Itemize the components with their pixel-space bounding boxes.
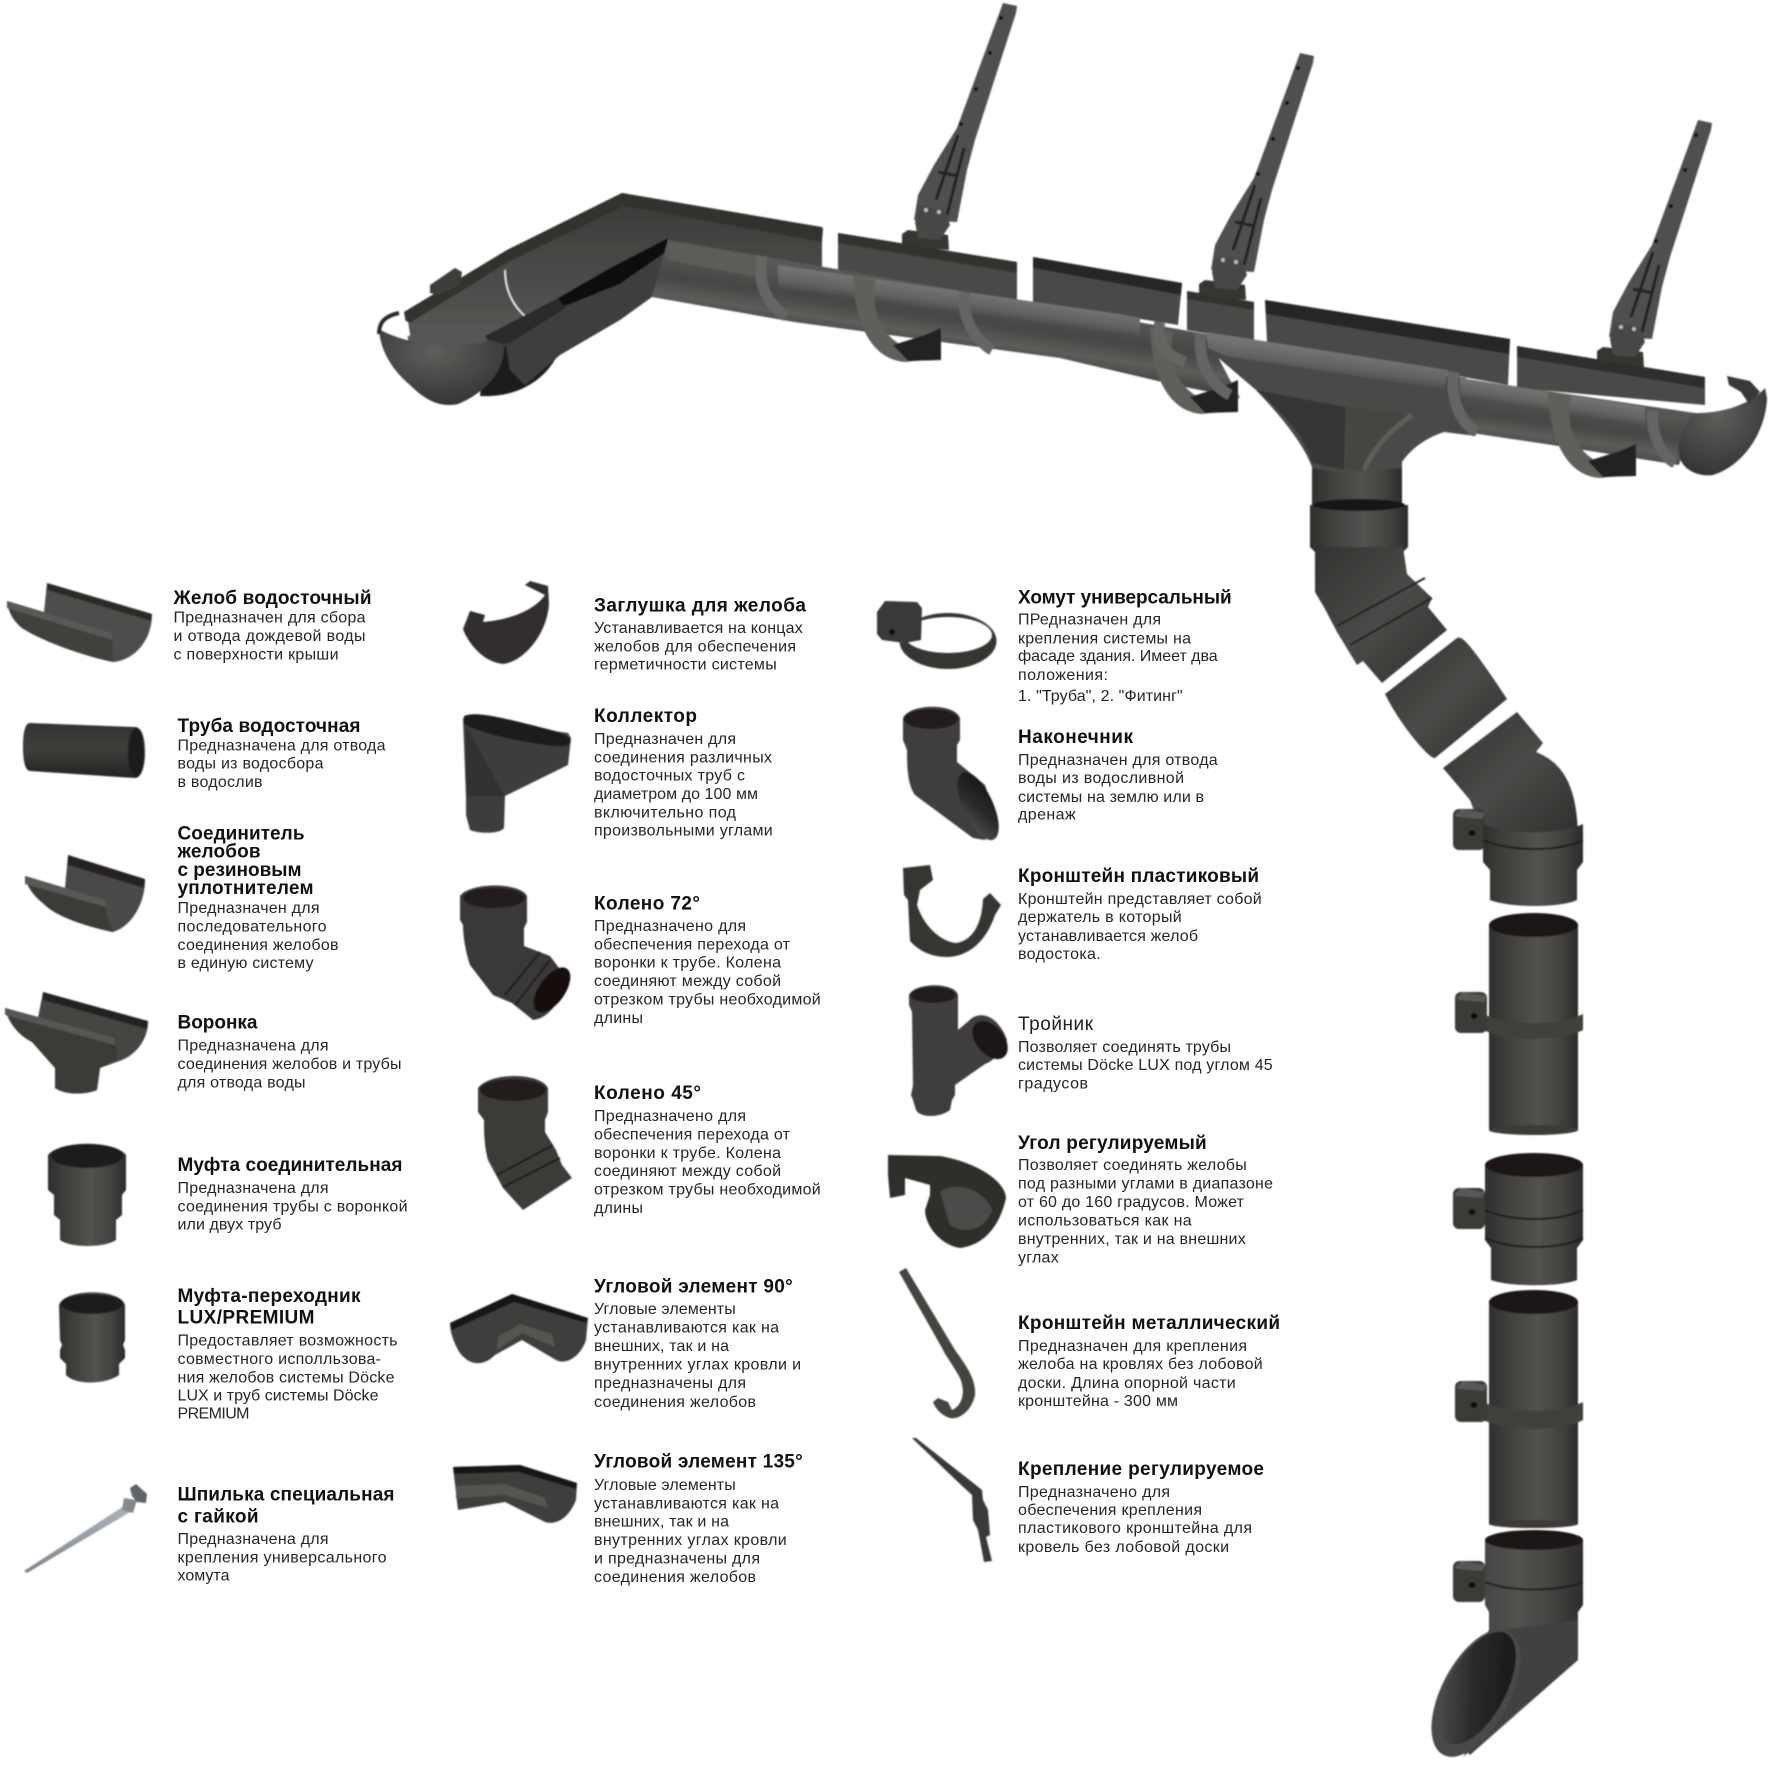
description bbox=[594, 620, 803, 674]
description: крепления системы на bbox=[1018, 630, 1191, 648]
description bbox=[174, 610, 366, 664]
description bbox=[178, 900, 338, 972]
icon: adjustable angle bbox=[888, 1155, 1006, 1248]
description: Позволяет соединять желобы bbox=[1018, 1157, 1247, 1174]
description bbox=[594, 1301, 801, 1411]
description: Предназначена для отвода bbox=[178, 738, 386, 755]
heading: LUX/PREMIUM bbox=[178, 1308, 314, 1329]
item: колено 45 bbox=[478, 1076, 821, 1217]
description bbox=[1018, 1484, 1252, 1556]
description: соединяют между собой bbox=[594, 1163, 781, 1180]
icon: elbow 72 bbox=[460, 886, 578, 1020]
description: или двух труб bbox=[178, 1217, 282, 1234]
loose pipe section bbox=[1385, 638, 1507, 758]
description bbox=[1018, 1157, 1273, 1267]
icon: collector bbox=[463, 714, 571, 833]
support loop 3 bbox=[1548, 392, 1636, 478]
heading: Заглушка для желоба bbox=[594, 595, 806, 616]
description: водостока. bbox=[1018, 946, 1101, 963]
description: LUX и труб системы Döcke bbox=[178, 1388, 379, 1405]
description bbox=[594, 918, 821, 1027]
description: Предназначен для bbox=[594, 731, 736, 748]
heading: Хомут универсальный bbox=[1018, 588, 1232, 609]
funnel outlet bbox=[1195, 334, 1476, 505]
description bbox=[1018, 891, 1262, 963]
item: угол регулируемый bbox=[888, 1133, 1273, 1267]
description: устанавливаются как на bbox=[594, 1320, 779, 1336]
icon: corner 90 bbox=[450, 1294, 588, 1363]
heading: Муфта соединительная bbox=[178, 1155, 402, 1176]
item: коллектор bbox=[463, 706, 773, 840]
description: обеспечения крепления bbox=[1018, 1502, 1202, 1519]
gutter body segment 1 bbox=[652, 240, 1240, 398]
description: произвольными углами bbox=[594, 823, 773, 840]
description: желоба на кровлях без лобовой bbox=[1018, 1356, 1263, 1373]
item: хомут универсальный bbox=[877, 588, 1232, 705]
description: соединения различных bbox=[594, 749, 772, 766]
icon: metal bracket bbox=[899, 1268, 975, 1418]
description: герметичности системы bbox=[594, 656, 777, 674]
main gutter and downpipe assembly bbox=[379, 3, 1767, 1765]
description: ния желобов системы Döcke bbox=[178, 1369, 395, 1386]
description: воды из водосливной bbox=[1018, 770, 1184, 787]
heading: Соединитель bbox=[178, 824, 304, 844]
lower elbow bbox=[1443, 712, 1578, 835]
description bbox=[1018, 752, 1218, 824]
description bbox=[178, 1180, 408, 1234]
description: фасаде здания. Имеет два bbox=[1018, 648, 1218, 665]
description: Предназначено для bbox=[594, 918, 746, 935]
heading: Колено 45° bbox=[594, 1083, 701, 1104]
end cap left bbox=[379, 313, 504, 405]
description: PREMIUM bbox=[178, 1406, 250, 1423]
description: Предназначена для bbox=[178, 1038, 328, 1055]
icon: elbow 45 bbox=[478, 1076, 572, 1210]
description: в единую систему bbox=[178, 955, 314, 972]
description: последовательного bbox=[178, 919, 327, 936]
icon: pipe bbox=[23, 723, 145, 778]
description bbox=[178, 738, 386, 791]
description: внутренних углах кровли bbox=[594, 1532, 787, 1549]
item: кронштейн пластиковый bbox=[903, 865, 1262, 963]
description: кронштейна - 300 мм bbox=[1018, 1393, 1178, 1410]
description: системы на землю или в bbox=[1018, 789, 1204, 806]
heading: Колено 72° bbox=[594, 894, 700, 914]
description: и предназначены для bbox=[594, 1550, 760, 1567]
description: устанавливаются как на bbox=[594, 1495, 779, 1512]
item: угловой элемент 90 bbox=[450, 1277, 801, 1411]
heading bbox=[178, 1286, 361, 1329]
hanger strap 3 bbox=[1597, 120, 1712, 367]
lug on nozzle bbox=[1453, 1561, 1485, 1602]
description: включительно под bbox=[594, 804, 737, 821]
description bbox=[594, 1108, 821, 1217]
description: Угловые элементы bbox=[594, 1477, 736, 1494]
icon: nozzle bbox=[903, 707, 1007, 846]
description: Предназначен для сбора bbox=[174, 610, 366, 627]
gutter clamps bbox=[761, 256, 1675, 463]
lug on coupling bbox=[1453, 1188, 1485, 1229]
item: угловой элемент 135 bbox=[453, 1452, 803, 1586]
description: Устанавливается на концах bbox=[594, 620, 803, 637]
front left gutter section bbox=[480, 252, 666, 396]
description: соединения трубы с воронкой bbox=[178, 1198, 408, 1215]
item: труба водосточная bbox=[23, 716, 386, 791]
description: соединения желобов bbox=[594, 1569, 756, 1586]
heading: Крепление регулируемое bbox=[1018, 1459, 1264, 1480]
description: диаметром до 100 мм bbox=[594, 786, 758, 803]
heading: Угловой элемент 90° bbox=[594, 1277, 793, 1298]
description: длины bbox=[594, 1200, 643, 1217]
description bbox=[594, 1477, 787, 1586]
rear gutter walls bbox=[404, 193, 1705, 405]
description: воронки к трубе. Колена bbox=[594, 1145, 781, 1162]
heading: с гайкой bbox=[178, 1506, 258, 1528]
heading bbox=[176, 824, 314, 899]
item: тройник bbox=[909, 985, 1273, 1116]
description: предназначены для bbox=[594, 1375, 746, 1392]
lug on upper pipe bbox=[1455, 992, 1487, 1033]
description: Предназначена для bbox=[178, 1531, 328, 1548]
heading: Наконечник bbox=[1018, 727, 1133, 748]
heading: уплотнителем bbox=[178, 878, 314, 899]
description: держатель в который bbox=[1018, 909, 1182, 926]
item: соединитель желобов bbox=[25, 824, 338, 972]
description: Предоставляет возможность bbox=[178, 1333, 398, 1350]
description: Предназначен для отвода bbox=[1018, 752, 1218, 769]
description: и отвода дождевой воды bbox=[174, 628, 366, 645]
description: системы Döcke LUX под углом 45 bbox=[1018, 1057, 1273, 1074]
description: воронки к трубе. Колена bbox=[594, 955, 781, 972]
description: водосточных труб с bbox=[594, 768, 745, 785]
description: под разными углами в диапазоне bbox=[1018, 1176, 1273, 1193]
lug on lower pipe bbox=[1455, 1381, 1487, 1422]
description: соединения желобов bbox=[178, 937, 338, 954]
description: Предназначено для bbox=[1018, 1484, 1170, 1501]
item: крепление регулируемое bbox=[912, 1438, 1264, 1562]
description: крепления универсального bbox=[178, 1550, 387, 1566]
socket under funnel bbox=[1310, 499, 1408, 552]
icon: y-tee bbox=[909, 985, 1015, 1116]
gutter body right bbox=[1460, 378, 1695, 465]
clamp ring on elbow bbox=[1483, 824, 1583, 906]
lug at lower elbow bbox=[1453, 809, 1485, 850]
description: соединения желобов и трубы bbox=[178, 1056, 402, 1073]
front bar right bbox=[1460, 378, 1645, 426]
right end cap bbox=[1678, 376, 1767, 475]
heading: Желоб водосточный bbox=[172, 588, 372, 609]
description: дренаж bbox=[1018, 807, 1076, 824]
corner gutter dark slot bbox=[558, 238, 668, 308]
description: соединения желобов bbox=[594, 1394, 756, 1411]
description: внешних, так и на bbox=[594, 1338, 729, 1355]
description: воды из водосбора bbox=[178, 756, 324, 773]
pipe section lower bbox=[1483, 1290, 1583, 1528]
description: Предназначена для bbox=[178, 1180, 328, 1197]
description: устанавливается желоб bbox=[1018, 928, 1198, 945]
description: в водослив bbox=[178, 774, 262, 791]
icon: pipe clamp bbox=[877, 601, 996, 669]
description: совместного исполльзова- bbox=[178, 1351, 381, 1368]
item: воронка bbox=[5, 992, 402, 1094]
front bar left bbox=[778, 265, 1140, 340]
item: муфта соединительная bbox=[48, 1144, 408, 1246]
heading: Воронка bbox=[178, 1013, 258, 1034]
description: желобов для обеспечения bbox=[594, 638, 796, 656]
description: 1. "Труба", 2. "Фитинг" bbox=[1018, 688, 1183, 705]
description: углах bbox=[1018, 1250, 1059, 1267]
description bbox=[178, 1333, 398, 1423]
description bbox=[178, 1531, 387, 1585]
description: обеспечения перехода от bbox=[594, 1126, 791, 1144]
description: ПРедназначен для bbox=[1018, 612, 1161, 629]
pipe section upper bbox=[1483, 913, 1583, 1135]
description: обеспечения перехода от bbox=[594, 937, 791, 954]
description: отрезком трубы необходимой bbox=[594, 992, 821, 1008]
front bar middle bbox=[1206, 332, 1448, 390]
description: Предназначено для bbox=[594, 1108, 746, 1125]
description: Предназначен для bbox=[178, 900, 320, 917]
description: положения: bbox=[1018, 667, 1108, 684]
icon: corner 135 bbox=[453, 1465, 577, 1523]
heading: Муфта-переходник bbox=[178, 1286, 361, 1307]
icon: end cap bbox=[463, 581, 549, 664]
heading: Кронштейн пластиковый bbox=[1018, 866, 1259, 887]
icon: adapter bbox=[59, 1292, 125, 1382]
heading: Шпилька специальная bbox=[178, 1485, 394, 1506]
hanger strap 2 bbox=[1199, 53, 1314, 300]
support loop 2 bbox=[1150, 328, 1238, 414]
description bbox=[594, 731, 773, 840]
item: шпилька специальная bbox=[24, 1484, 394, 1585]
description bbox=[1018, 1039, 1273, 1093]
description: Кронштейн представляет собой bbox=[1018, 891, 1262, 908]
icon: adjustable mount bbox=[912, 1438, 992, 1562]
item: заглушка для желоба bbox=[463, 581, 806, 674]
heading: желобов bbox=[176, 842, 260, 863]
description: внешних, так и на bbox=[594, 1514, 729, 1531]
description: длины bbox=[594, 1010, 643, 1027]
description: хомута bbox=[178, 1568, 230, 1585]
icon: gutter connector bbox=[25, 855, 145, 932]
item: желоб водосточный bbox=[7, 583, 372, 664]
heading: Тройник bbox=[1018, 1014, 1094, 1035]
description: доски. Длина опорной части bbox=[1018, 1375, 1236, 1392]
description: кровель без лобовой доски bbox=[1018, 1539, 1229, 1556]
description: внутренних углах кровли и bbox=[594, 1356, 801, 1374]
item: кронштейн металлический bbox=[899, 1268, 1280, 1418]
heading: с резиновым bbox=[178, 860, 302, 881]
icon: gutter bbox=[7, 583, 152, 662]
hanger strap 1 bbox=[902, 3, 1017, 250]
description: Угловые элементы bbox=[594, 1301, 736, 1318]
heading: Кронштейн металлический bbox=[1018, 1313, 1280, 1334]
description bbox=[178, 1038, 402, 1092]
elbow 1 with slanted outlet bbox=[1315, 547, 1447, 683]
heading bbox=[178, 1485, 394, 1528]
description: пластикового кронштейна для bbox=[1018, 1520, 1252, 1537]
description: отрезком трубы необходимой bbox=[594, 1182, 821, 1198]
description: от 60 до 160 градусов. Может bbox=[1018, 1194, 1245, 1211]
description bbox=[1018, 612, 1218, 705]
description: для отвода воды bbox=[178, 1074, 306, 1092]
description: Позволяет соединять трубы bbox=[1018, 1039, 1231, 1056]
icon: plastic bracket bbox=[903, 865, 1001, 957]
item: муфта-переходник bbox=[59, 1286, 398, 1423]
icon: coupler bbox=[48, 1144, 126, 1246]
description bbox=[1018, 1338, 1263, 1410]
description: соединяют между собой bbox=[594, 973, 781, 990]
heading: Угловой элемент 135° bbox=[594, 1452, 803, 1473]
heading: Труба водосточная bbox=[178, 716, 360, 737]
heading: Коллектор bbox=[594, 706, 697, 727]
description: использоваться как на bbox=[1018, 1213, 1192, 1230]
icon: threaded pin bbox=[24, 1484, 147, 1573]
corner light strip bbox=[668, 241, 762, 278]
coupling bbox=[1485, 1153, 1583, 1285]
nozzle assembly bbox=[1413, 1530, 1583, 1765]
item: наконечник bbox=[903, 707, 1218, 846]
heading: Угол регулируемый bbox=[1018, 1133, 1207, 1154]
icon: funnel bbox=[5, 992, 148, 1094]
description: Предназначен для крепления bbox=[1018, 1338, 1247, 1355]
support loop 1 bbox=[853, 276, 941, 362]
description: градусов bbox=[1018, 1076, 1088, 1093]
item: колено 72 bbox=[460, 886, 821, 1027]
description: с поверхности крыши bbox=[174, 646, 338, 664]
description: внутренних, так и на внешних bbox=[1018, 1231, 1246, 1248]
